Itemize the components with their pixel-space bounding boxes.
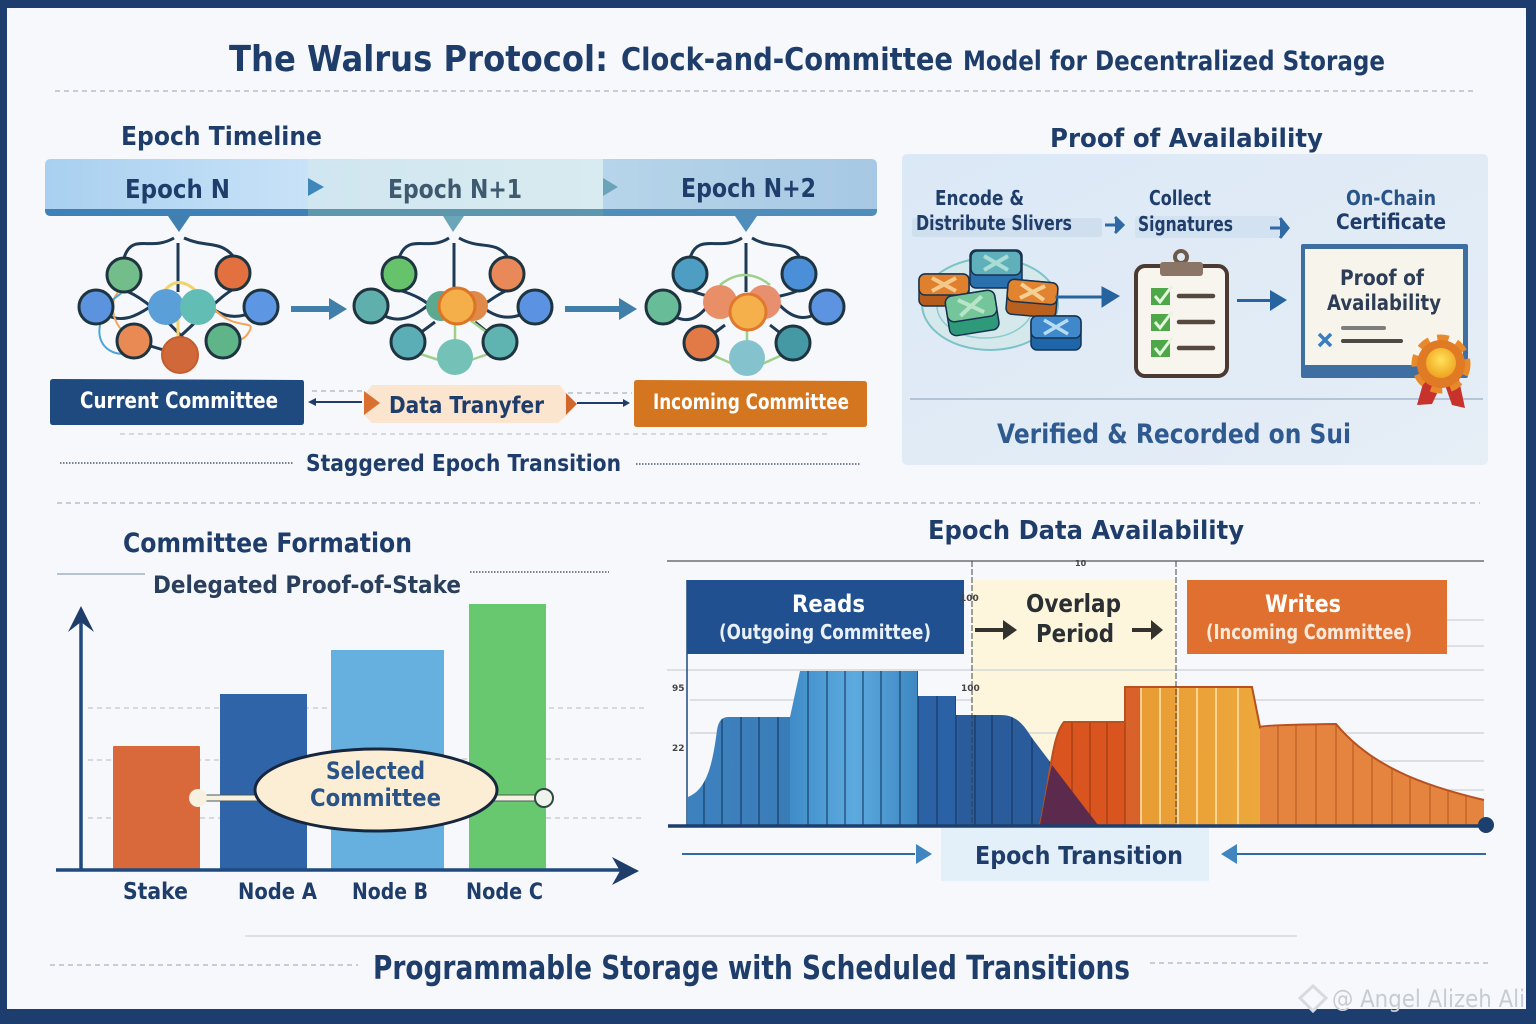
box: writes: Writes [1265, 590, 1341, 618]
step label: collect signatures: Signatures [1138, 212, 1233, 236]
axis tick labels: 22 [672, 744, 685, 754]
axis tick labels: 100 [960, 594, 979, 604]
label: data transfer: Data Tranyfer [389, 393, 545, 419]
arrow: into epoch transition left [682, 844, 932, 864]
title: The Walrus Protocol: [229, 39, 608, 80]
epoch banner: Epoch N+1 [388, 175, 522, 205]
step label: encode and distribute: Distribute Slivers [916, 211, 1072, 235]
connector: selected committee [189, 789, 553, 807]
axis labels: Node B [352, 880, 428, 905]
title: Clock-and-Committee [621, 42, 953, 78]
network: current committee [79, 238, 278, 373]
arrow: clipboard to certificate [1237, 290, 1287, 311]
axis tick labels: 95 [672, 684, 685, 694]
bar chart [113, 604, 546, 869]
step label: on-chain certificate: Certificate [1336, 210, 1446, 234]
panel: committee formation [56, 528, 645, 905]
panel: epoch timeline [45, 122, 877, 477]
box: overlap period: Overlap [1026, 589, 1121, 618]
panel: epoch data availability [667, 516, 1494, 881]
box: reads: Reads [792, 590, 865, 618]
heading: committee formation: Committee Formation [123, 528, 412, 559]
axis labels: Node A [238, 880, 317, 905]
step label: on-chain certificate: On-Chain [1346, 186, 1436, 210]
icon: sliver blocks [919, 250, 1081, 350]
box: overlap period: Period [1036, 619, 1114, 648]
arrow: slivers to clipboard [1056, 287, 1119, 307]
heading: proof of availability: Proof of Availability [1050, 124, 1323, 154]
step label: collect signatures [1138, 186, 1233, 236]
step label: on-chain certificate [1336, 186, 1446, 234]
title: Model for Decentralized Storage [963, 46, 1385, 77]
network: incoming committee [646, 238, 844, 376]
step label: collect signatures: Collect [1149, 186, 1211, 210]
heading: epoch timeline: Epoch Timeline [121, 122, 322, 152]
overlap region [1040, 765, 1098, 825]
step label: encode and distribute: Encode & [935, 186, 1024, 210]
icon: clipboard [1136, 251, 1227, 376]
axis labels: Node C [466, 880, 543, 905]
network: transition committee [354, 238, 552, 375]
arrow: to collect [1105, 217, 1123, 233]
callout: selected committee [255, 749, 497, 831]
box: reads [687, 580, 964, 654]
callout: selected committee: Committee [310, 784, 441, 812]
area chart: writes [1040, 680, 1484, 830]
caption: verified and recorded: Verified & Recorded on Sui [997, 419, 1351, 450]
footer tagline: Programmable Storage with Scheduled Transitions [373, 948, 1130, 987]
overlap band [972, 580, 1176, 825]
label: epoch transition: Epoch Transition [975, 841, 1183, 870]
axis labels: Stake [123, 879, 188, 905]
certificate: proof of availability: Availability [1327, 291, 1441, 315]
step label: encode and distribute [916, 186, 1072, 235]
callout: selected committee: Selected [326, 757, 425, 785]
label: data transfer [364, 385, 567, 423]
label: current committee: Current Committee [80, 389, 278, 414]
label: incoming committee [634, 380, 867, 427]
label: incoming committee: Incoming Committee [653, 390, 849, 414]
epoch banner: Epoch N [125, 175, 230, 205]
arrow: current to data transfer [308, 398, 362, 406]
area chart: reads [688, 671, 1050, 824]
axis tick labels: 10 [1075, 559, 1087, 568]
box: reads: (Outgoing Committee) [719, 620, 931, 644]
arrow: epoch N+1 to N+2 [565, 298, 637, 320]
label: current committee [50, 379, 304, 425]
time axis [668, 817, 1494, 833]
box: writes [1187, 580, 1447, 654]
caption: staggered epoch transition: Staggered Epoch Transition [306, 451, 621, 477]
arrow: into epoch transition right [1221, 844, 1486, 864]
arrow: data transfer to incoming [566, 393, 630, 415]
epoch banner: Epoch N+2 [681, 174, 816, 204]
box: overlap period [975, 589, 1163, 648]
icon: award seal [1416, 339, 1466, 408]
heading: epoch data availability: Epoch Data Availability [928, 516, 1244, 546]
axis tick labels [672, 559, 1087, 754]
arrow: epoch N to N+1 [291, 298, 347, 320]
box: writes: (Incoming Committee) [1206, 620, 1412, 644]
panel: proof of availability [902, 154, 1488, 465]
arrow: to certificate [1270, 218, 1288, 238]
certificate: proof of availability: Proof of [1340, 266, 1425, 290]
label: epoch transition [941, 828, 1209, 881]
axes [56, 606, 639, 885]
subheading: delegated proof of stake: Delegated Proof-of-Stake [153, 571, 461, 599]
axis labels [123, 879, 543, 905]
axis tick labels: 100 [961, 684, 980, 694]
certificate: proof of availability [1301, 244, 1468, 378]
title [229, 39, 1385, 80]
epoch banner [45, 159, 877, 232]
